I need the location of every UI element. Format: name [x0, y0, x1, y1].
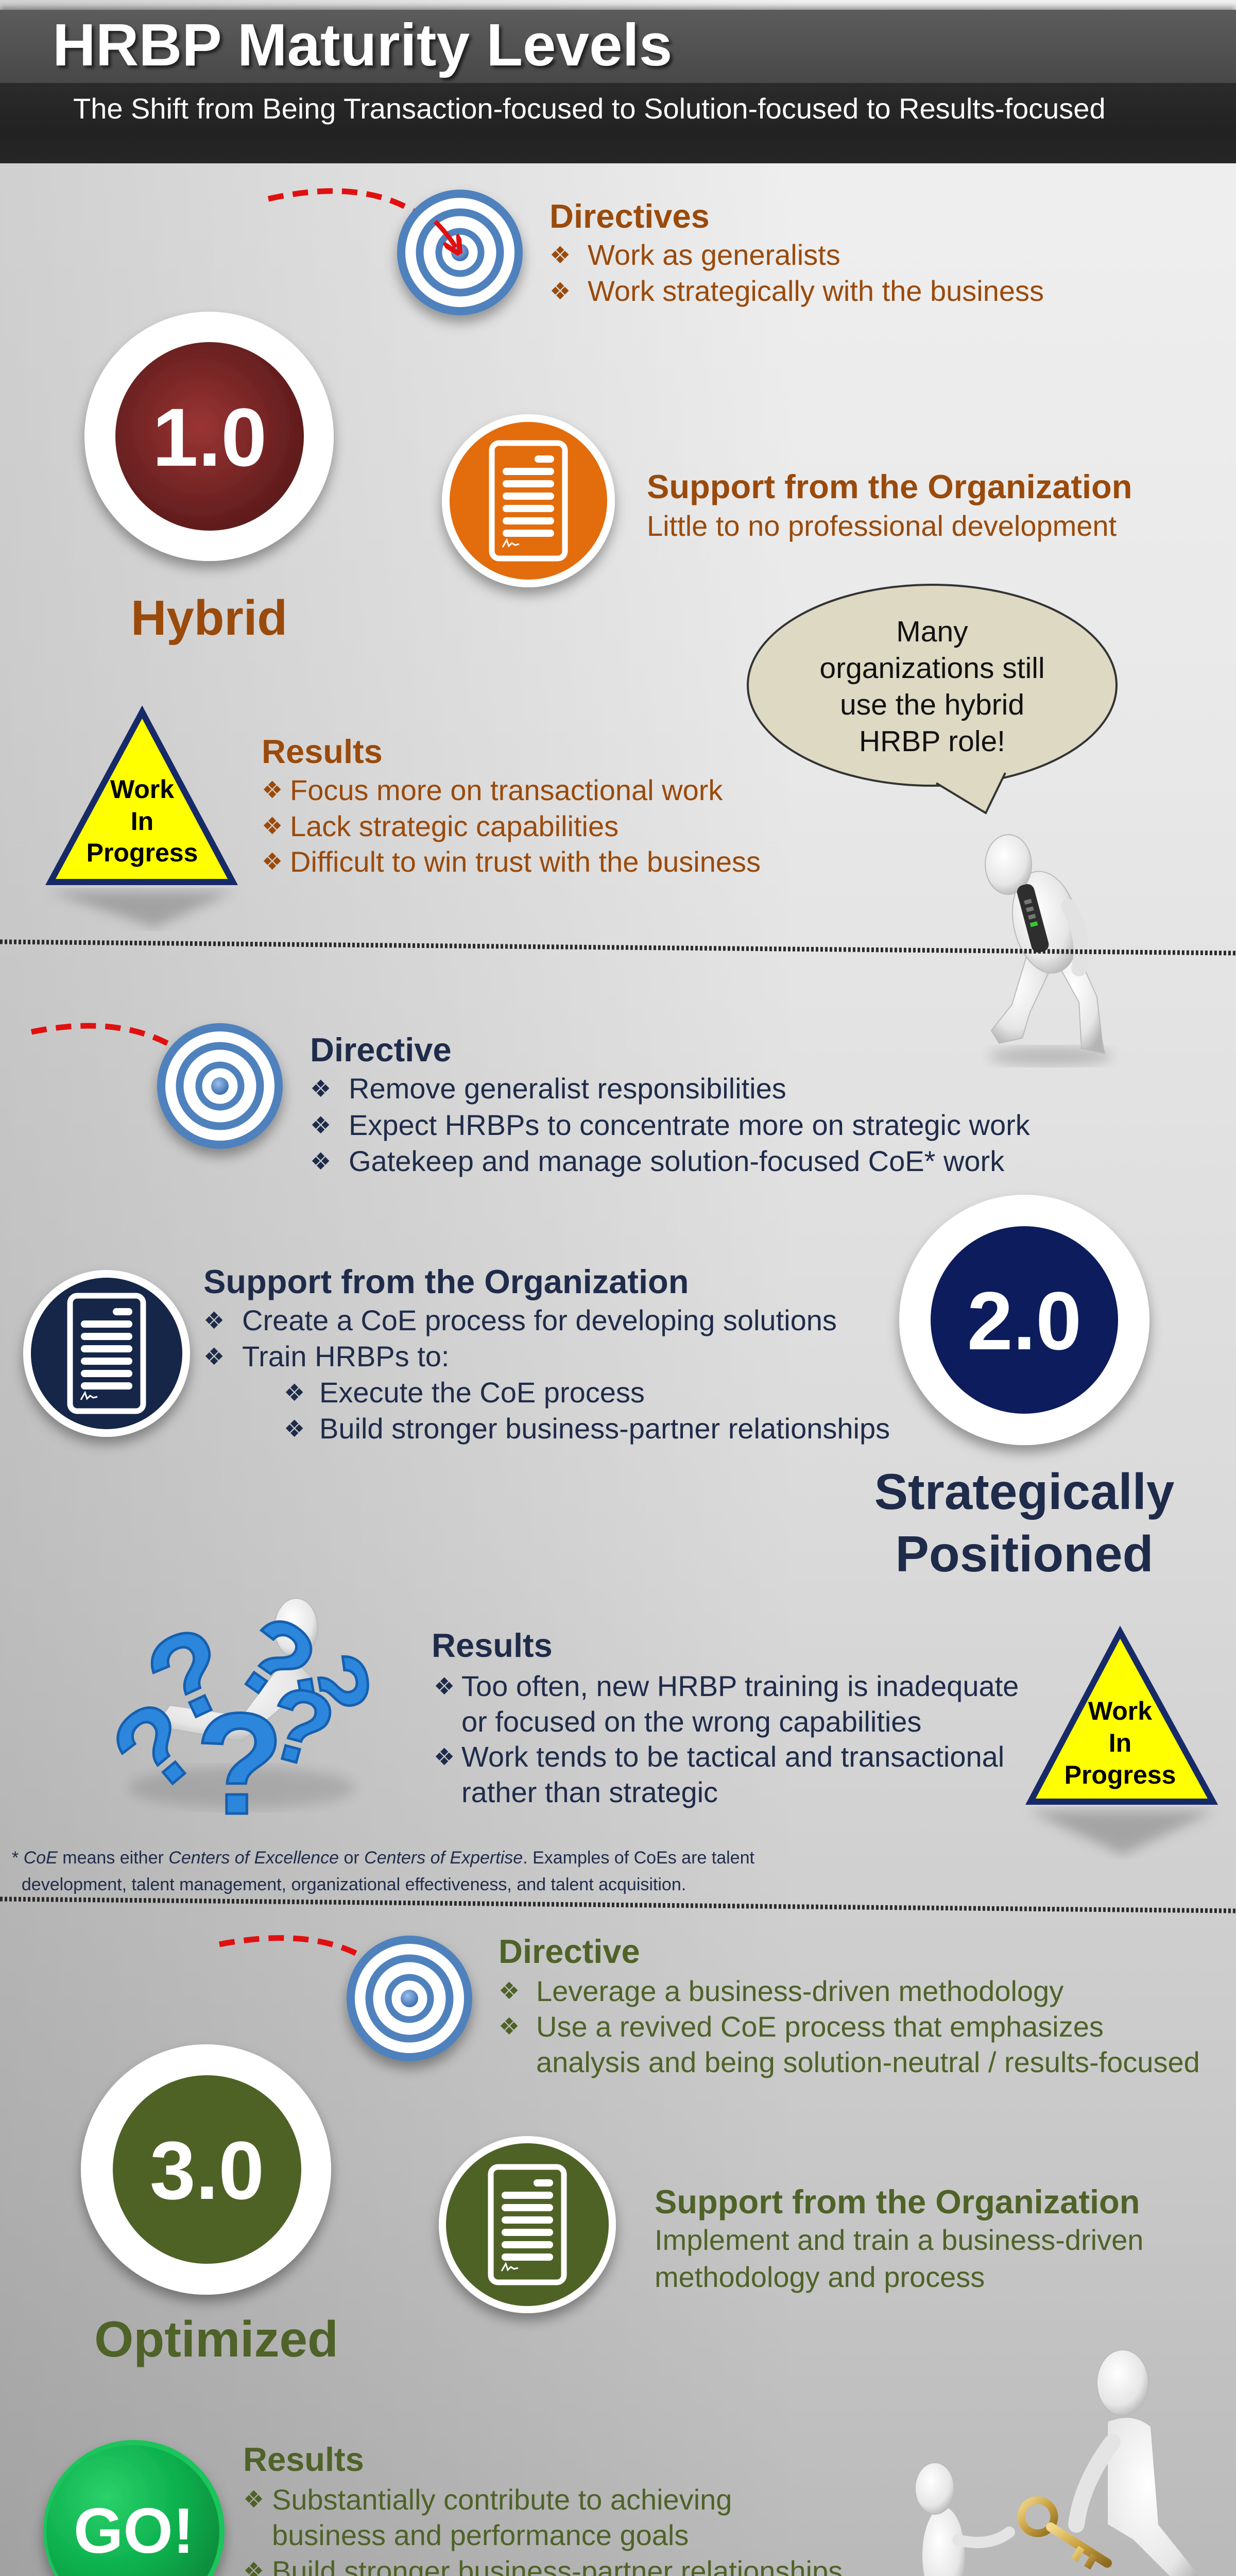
footnote: * CoE means either Centers of Excellence or Centers of Expertise. Examples of CoEs are talent: [12, 1848, 754, 1868]
heading: Directive: Directive: [499, 1933, 640, 1970]
list: support 2: [203, 1304, 890, 1445]
panel: support 2: [203, 1263, 890, 1445]
list: results 3: Substantially contribute to achieving: [272, 2483, 732, 2516]
list: results 1: ❖: [262, 776, 283, 804]
text: 1.0 number: 1.0: [152, 391, 267, 483]
footnote: development, talent management, organizational effectiveness, and talent acquisition.: [22, 1875, 686, 1894]
panel: directive 2: [310, 1031, 1030, 1177]
level 3.0 circle: [81, 2044, 331, 2295]
icon: target 2: [161, 1027, 279, 1145]
illustration: figures with key: [915, 2350, 1208, 2576]
list: directive 3: Use a revived CoE process that emphasizes: [536, 2010, 1104, 2043]
illustration: question marks pile: ?: [196, 1684, 284, 1844]
callout: speech bubble text: use the hybrid: [840, 688, 1024, 721]
title: HRBP Maturity Levels: [53, 11, 672, 78]
heading: Support from the Organization: Support from the Organization: [203, 1263, 689, 1300]
list: support 2: Create a CoE process for developing solutions: [242, 1304, 837, 1336]
heading: Strategically Positioned: [874, 1463, 1174, 1582]
list: directive 2: ❖: [310, 1147, 331, 1175]
list: directives 1: Work strategically with the business: [588, 275, 1044, 307]
icon: target 1: [401, 194, 519, 311]
panel: directive 3: [499, 1931, 1230, 2081]
list: results 3: [243, 2482, 861, 2576]
icon: GO circle: [43, 2440, 225, 2576]
illustration: walking figure: [985, 835, 1112, 1065]
list: results 1: ❖: [262, 848, 283, 875]
text: work in progress 1: Work: [110, 775, 174, 804]
divider 2: [0, 1899, 1236, 1911]
list: directives 1: Work as generalists: [588, 239, 840, 271]
list: directive 3: ❖: [499, 2012, 520, 2040]
list: results 3: business and performance goals: [272, 2519, 689, 2551]
list: results 2: ❖: [434, 1743, 455, 1771]
callout: speech bubble text: [819, 615, 1045, 758]
arrow: red arrow on target 1: [435, 222, 456, 247]
text: work in progress 1: [87, 775, 198, 867]
text: work in progress 2: In: [1109, 1728, 1131, 1757]
icon: target 3: [351, 1940, 468, 2057]
list: directive 2: Expect HRBPs to concentrate more on strategic work: [349, 1109, 1030, 1141]
text: work in progress 2: [1065, 1697, 1176, 1789]
heading: Directives: Directives: [550, 197, 710, 235]
list: results 2: [434, 1670, 1019, 1808]
list: results 1: Lack strategic capabilities: [290, 810, 619, 842]
title band: [0, 10, 1236, 83]
list: results 1: ❖: [262, 812, 283, 840]
subtitle band: [0, 83, 1236, 163]
illustration: question marks pile: [88, 1590, 392, 1844]
illustration: question marks pile: ?: [128, 1600, 249, 1750]
list: support 2: ❖: [284, 1415, 305, 1443]
heading: Optimized: Optimized: [94, 2311, 338, 2367]
heading: Support from the Organization: Support from the Organization: [655, 2183, 1140, 2221]
list: directive 2: Gatekeep and manage solution-focused CoE* work: [349, 1145, 1004, 1177]
text: GO!: GO!: [74, 2496, 194, 2567]
icon: work in progress triangle 2: [1029, 1632, 1214, 1855]
illustration: question marks pile: ?: [274, 1645, 392, 1723]
panel: results 1: [262, 733, 761, 878]
list: results 2: or focused on the wrong capabilities: [461, 1705, 921, 1738]
heading: Hybrid: Hybrid: [131, 590, 287, 646]
heading: Results: Results: [262, 733, 383, 770]
speech bubble: [748, 585, 1117, 813]
text: work in progress 2: Work: [1088, 1697, 1152, 1725]
panel: support 3: [655, 2182, 1221, 2295]
list: results 1: [262, 774, 761, 878]
list: support 2: Train HRBPs to:: [242, 1340, 449, 1372]
icon: orange document circle: [442, 414, 615, 587]
list: support 2: ❖: [203, 1307, 225, 1334]
text: work in progress 1: Progress: [87, 838, 198, 867]
header: [0, 3, 1236, 163]
illustration: question marks pile: ?: [88, 1676, 222, 1818]
heading: Results: Results: [243, 2441, 364, 2478]
subtitle: The Shift from Being Transaction-focused to Solution-focused to Results-focused: [73, 92, 1106, 125]
list: directives 1: [550, 239, 1044, 307]
heading: Results: Results: [432, 1626, 553, 1664]
arrow: dashed arrow into target 1: [268, 191, 452, 247]
text: support 3: [655, 2222, 1143, 2296]
footnote: [12, 1844, 939, 1898]
list: results 2: Work tends to be tactical and transactional: [461, 1740, 1004, 1773]
panel: results 2: [432, 1626, 1019, 1808]
callout: speech bubble text: Many: [896, 615, 968, 648]
divider 1: [0, 942, 1236, 953]
illustration: question marks pile: ?: [255, 1664, 346, 1791]
list: directive 2: [310, 1072, 1030, 1177]
panel: support 1: [647, 468, 1132, 542]
list: support 2: Execute the CoE process: [319, 1376, 645, 1409]
panel: results 3: [243, 2439, 861, 2576]
arrow: dashed arrow into target 2: [31, 1026, 214, 1082]
level 2.0 circle: [899, 1195, 1149, 1445]
list: results 1: Focus more on transactional work: [290, 774, 723, 806]
text: work in progress 1: In: [131, 807, 153, 836]
list: directive 3: Leverage a business-driven methodology: [536, 1975, 1063, 2007]
level 1.0 circle: [84, 312, 334, 561]
heading: Strategically Positioned: Positioned: [896, 1526, 1153, 1582]
list: results 2: ❖: [434, 1672, 455, 1700]
list: directive 2: ❖: [310, 1111, 331, 1139]
list: directive 2: Remove generalist responsibilities: [349, 1072, 786, 1105]
list: directive 3: [499, 1973, 1230, 2080]
list: directives 1: ❖: [550, 277, 571, 305]
callout: speech bubble text: HRBP role!: [859, 725, 1005, 758]
panel: directives 1: [550, 197, 1044, 307]
text: 2.0 number: 2.0: [967, 1275, 1082, 1367]
list: directive 3: analysis and being solution-neutral / results-focused: [536, 2046, 1200, 2078]
text: support 3: Implement and train a business-driven: [655, 2224, 1143, 2256]
list: directive 2: ❖: [310, 1075, 331, 1103]
text: work in progress 2: Progress: [1065, 1760, 1176, 1789]
text: 3.0 number: 3.0: [150, 2124, 264, 2216]
heading: Support from the Organization: Support from the Organization: [647, 468, 1132, 505]
list: directive 3: ❖: [499, 1977, 520, 2005]
list: results 3: ❖: [243, 2485, 264, 2513]
icon: work in progress triangle 1: [49, 712, 234, 927]
heading: Directive: Directive: [310, 1031, 452, 1069]
list: results 2: Too often, new HRBP training is inadequate: [461, 1670, 1019, 1702]
icon: navy document circle: [23, 1270, 190, 1437]
text: support 3: methodology and process: [655, 2261, 985, 2293]
illustration: question marks pile: ?: [214, 1590, 337, 1727]
callout: speech bubble text: organizations still: [819, 652, 1045, 685]
list: support 2: ❖: [284, 1379, 305, 1406]
list: support 2: Build stronger business-partner relationships: [319, 1412, 890, 1445]
list: results 1: Difficult to win trust with the business: [290, 845, 761, 878]
list: results 2: rather than strategic: [461, 1776, 718, 1808]
heading: Strategically Positioned: Strategically: [874, 1463, 1174, 1520]
list: directives 1: ❖: [550, 241, 571, 269]
icon: olive document circle: [439, 2136, 616, 2313]
text: support 1: Little to no professional development: [647, 510, 1117, 542]
list: support 2: ❖: [203, 1343, 225, 1370]
arrow: dashed arrow into target 3: [219, 1938, 404, 1994]
